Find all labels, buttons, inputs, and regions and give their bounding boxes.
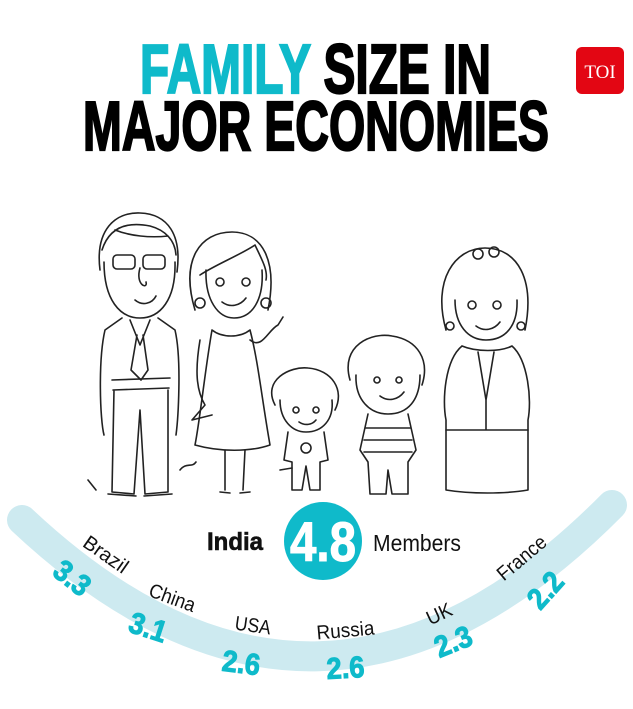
country labels: USA [233,613,273,640]
figure: boy [348,335,424,494]
india highlight [207,502,461,580]
country values: 3.3 [47,554,97,603]
figure: grandmother [442,247,529,493]
figure: mother [88,232,292,493]
figure: toddler [272,368,338,490]
country values: 2.6 [326,651,365,686]
country values [47,554,571,686]
logo: TOI [576,47,624,94]
country labels: China [146,580,199,617]
country labels [79,531,551,645]
india highlight: India [207,528,264,556]
country values: 2.3 [430,620,477,665]
country labels: Brazil [79,532,132,578]
country values: 2.6 [220,645,262,682]
india highlight: Members [373,530,461,556]
india highlight: 4.8 [290,510,356,573]
country labels: France [493,531,551,585]
illustration: family line art [88,213,529,496]
country values: 3.1 [125,606,171,650]
country labels: UK [423,599,456,630]
title [83,30,549,165]
country values: 2.2 [521,565,571,616]
arc band [22,505,612,656]
country labels: Russia [316,617,376,645]
figure: father [99,213,179,496]
title: FAMILY SIZE IN [140,30,491,108]
logo: TOI: TOI [584,62,616,83]
